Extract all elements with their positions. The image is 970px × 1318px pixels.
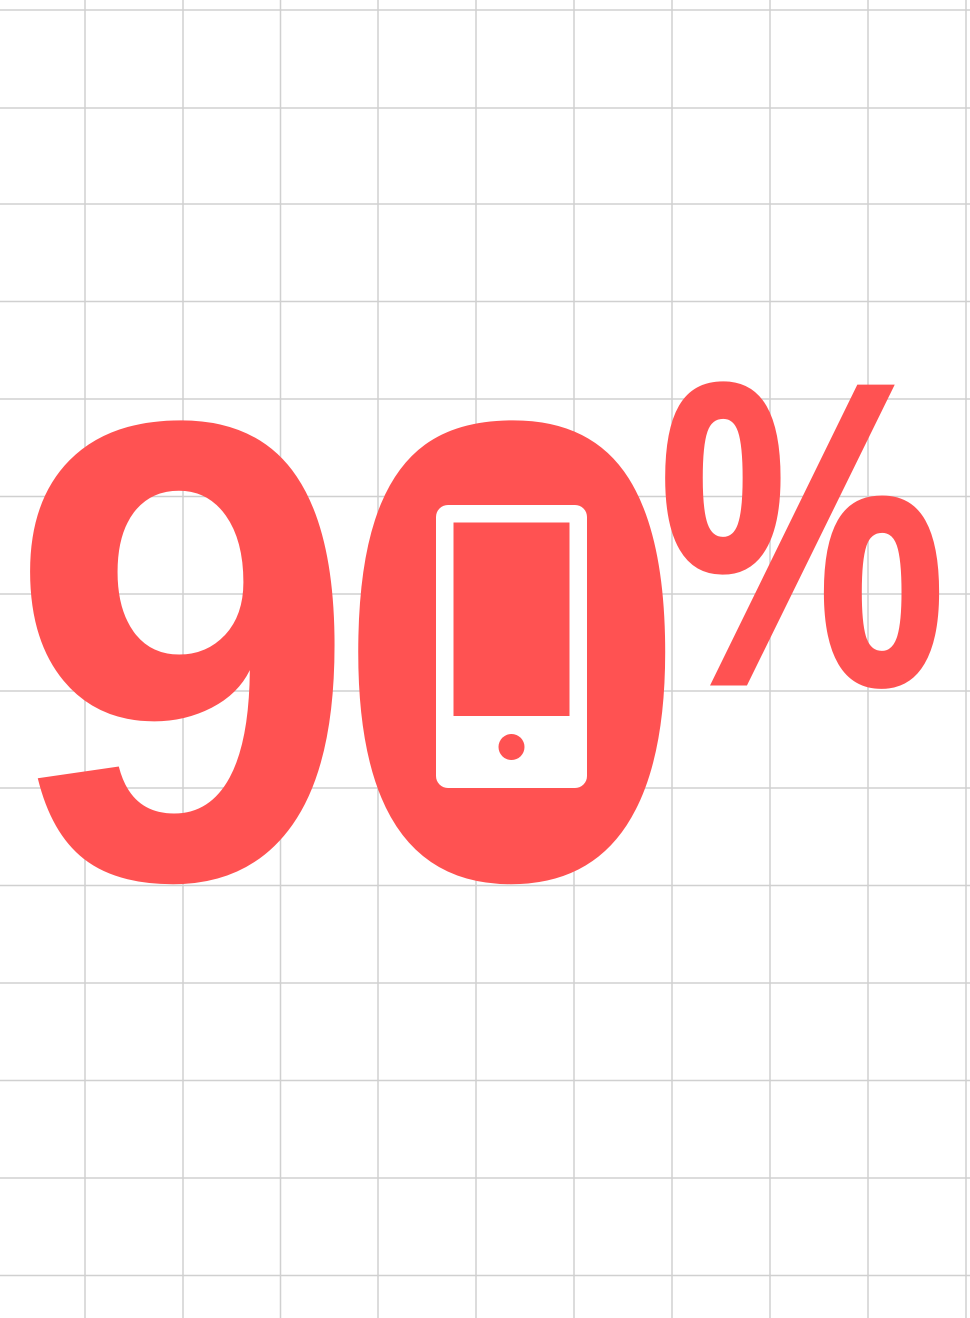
big number: 90 bbox=[8, 284, 692, 1018]
digit 0: 0 bbox=[333, 284, 692, 1017]
digit 9: 9 bbox=[8, 286, 358, 1018]
percent sign: % bbox=[659, 294, 946, 775]
icon: smartphone bbox=[418, 480, 605, 830]
